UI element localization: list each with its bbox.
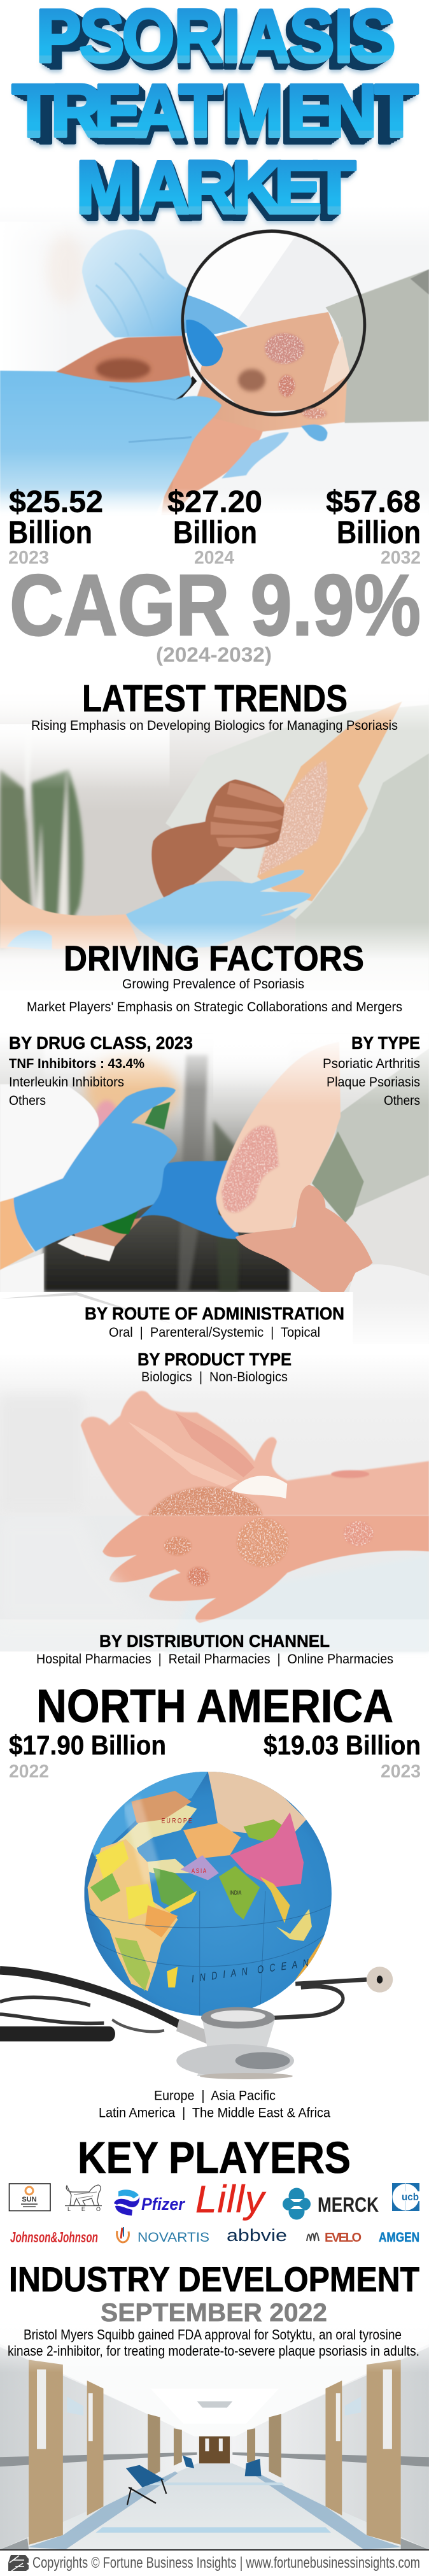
factor 1: Growing Prevalence of Psoriasis xyxy=(122,976,304,992)
drug class items: TNF Inhibitors : 43.4% xyxy=(9,1057,144,1071)
title extrusion: MARKET xyxy=(80,149,352,232)
title extrusion xyxy=(15,0,416,236)
logo: Lilly: Lilly xyxy=(195,2178,267,2221)
title extrusion: MARKET xyxy=(78,147,354,231)
plant xyxy=(0,730,83,948)
date: SEPTEMBER 2022 xyxy=(101,2298,327,2327)
driving factors xyxy=(27,938,402,1014)
globe: E U R O P E xyxy=(162,1818,192,1825)
drug class items: Interleukin Inhibitors xyxy=(9,1074,124,1090)
market size stats xyxy=(8,485,421,568)
segment: by type xyxy=(323,1033,420,1108)
globe: I N D I A N O C E A N xyxy=(191,1957,309,1985)
title extrusion: TREATMENT xyxy=(24,76,407,159)
logo: Merck: MERCK xyxy=(318,2193,379,2216)
value 2022: 2022 xyxy=(9,1761,49,1782)
CAGR period: (2024-2032) xyxy=(156,643,272,666)
logo: LEO: L E O xyxy=(67,2206,101,2212)
photo: hospital corridor xyxy=(0,2324,429,2549)
logo: Novartis: NOVARTIS xyxy=(137,2230,209,2245)
logo: Sun xyxy=(9,2184,50,2211)
stat 2023 xyxy=(8,485,103,568)
logo: UCB: ucb xyxy=(402,2192,419,2203)
type items: Others xyxy=(384,1093,420,1108)
logo: AbbVie: abbvie xyxy=(227,2226,287,2245)
title extrusion: MARKET xyxy=(81,150,350,234)
photo: spray on elbow lesions xyxy=(0,1034,429,1351)
logo: Evelo: EVELO xyxy=(325,2231,362,2245)
logo: Pfizer: Pfizer xyxy=(141,2195,185,2214)
icon: Fortune Business Insights logo xyxy=(8,2555,29,2571)
heading: by drug class: BY DRUG CLASS, 2023 xyxy=(9,1033,193,1053)
photo: globe with stethoscope xyxy=(0,1771,393,2077)
logo: Sun: SUN xyxy=(22,2196,37,2203)
drug class items xyxy=(9,1057,144,1108)
segment: by distribution channel xyxy=(36,1632,393,1667)
hero photo: gloved hands examining arm with magnifier xyxy=(0,206,429,515)
stat 2032: 2032 xyxy=(381,548,421,568)
factor 2: Market Players' Emphasis on Strategic Collaborations and Mergers xyxy=(27,999,402,1014)
heading: north america: NORTH AMERICA xyxy=(36,1681,393,1732)
logo: LEO xyxy=(65,2185,102,2212)
segment: by route of administration xyxy=(85,1304,344,1340)
latest trends xyxy=(31,678,398,733)
logo: Pfizer xyxy=(114,2189,185,2216)
product items: Biologics | Non-Biologics xyxy=(141,1369,288,1384)
title: Psoriasis Treatment Market xyxy=(12,0,418,236)
logo: Novartis xyxy=(117,2227,209,2245)
heading: latest trends: LATEST TRENDS xyxy=(82,678,348,720)
heading: by distribution channel: BY DISTRIBUTION CHANNEL xyxy=(99,1632,330,1651)
heading: by type: BY TYPE xyxy=(351,1033,420,1053)
logo: Evelo xyxy=(307,2231,362,2245)
type items: Psoriatic Arthritis xyxy=(323,1056,420,1071)
heading: driving factors: DRIVING FACTORS xyxy=(64,938,364,978)
heading: by route: BY ROUTE OF ADMINISTRATION xyxy=(85,1304,344,1323)
heading: by product type: BY PRODUCT TYPE xyxy=(137,1349,292,1369)
stethoscope base xyxy=(200,2073,293,2079)
photo: cream on hand, lower xyxy=(0,1516,429,1651)
stat 2023: $25.52 xyxy=(9,485,103,519)
value 2022 xyxy=(9,1730,166,1782)
globe: A S I A xyxy=(192,1867,206,1874)
title extrusion: MARKET xyxy=(83,152,348,236)
title extrusion: TREATMENT xyxy=(21,74,409,158)
logo: Johnson & Johnson: Johnson&Johnson xyxy=(10,2229,98,2245)
stat 2024 xyxy=(167,485,262,568)
company logos xyxy=(9,2178,419,2245)
title extrusion: PSORIASIS xyxy=(46,0,385,84)
stat 2023: 2023 xyxy=(8,548,49,568)
development text xyxy=(8,2327,419,2359)
region: north america xyxy=(9,1681,421,1782)
title faces: MARKET xyxy=(76,146,356,229)
title extrusion: PSORIASIS xyxy=(44,0,388,83)
stat 2023: Billion xyxy=(8,515,92,550)
type items: Plaque Psoriasis xyxy=(327,1074,420,1090)
title faces: TREATMENT xyxy=(12,69,418,153)
other regions: Latin America | The Middle East & Africa xyxy=(99,2105,330,2121)
stat 2032: $57.68 xyxy=(326,485,421,519)
trend text: Rising Emphasis on Developing Biologics for Managing Psoriasis xyxy=(31,718,398,733)
title faces xyxy=(12,0,418,229)
drug class items: Others xyxy=(9,1093,46,1108)
value 2022: $17.90 Billion xyxy=(9,1730,166,1761)
title extrusion: TREATMENT xyxy=(15,71,416,155)
title extrusion: TREATMENT xyxy=(18,73,412,156)
photo: doctor examining elbow xyxy=(0,688,429,992)
stat 2024: 2024 xyxy=(194,548,234,568)
heading: key players: KEY PLAYERS xyxy=(78,2133,351,2182)
footer xyxy=(0,2549,429,2576)
other regions xyxy=(99,2088,330,2121)
route items: Oral | Parenteral/Systemic | Topical xyxy=(109,1325,320,1340)
segment: by product type xyxy=(137,1349,292,1384)
globe: INDIA xyxy=(230,1889,242,1896)
segment: by drug class xyxy=(9,1033,193,1108)
type items xyxy=(323,1056,420,1108)
other regions: Europe | Asia Pacific xyxy=(154,2088,276,2103)
stat 2024: $27.20 xyxy=(167,485,262,519)
logo: Amgen: AMGEN xyxy=(379,2230,419,2245)
value 2023: 2023 xyxy=(381,1761,421,1782)
value 2023 xyxy=(264,1730,421,1782)
logo: Merck xyxy=(283,2188,379,2220)
channel items: Hospital Pharmacies | Retail Pharmacies | Online Pharmacies xyxy=(36,1651,393,1667)
photo: cream on hand, upper xyxy=(0,1354,429,1516)
logo: UCB xyxy=(392,2183,419,2211)
globe xyxy=(82,1771,332,2016)
stat 2024: Billion xyxy=(173,515,257,550)
stethoscope xyxy=(0,1967,393,2077)
stat 2032 xyxy=(326,485,421,568)
industry development xyxy=(8,2259,419,2359)
